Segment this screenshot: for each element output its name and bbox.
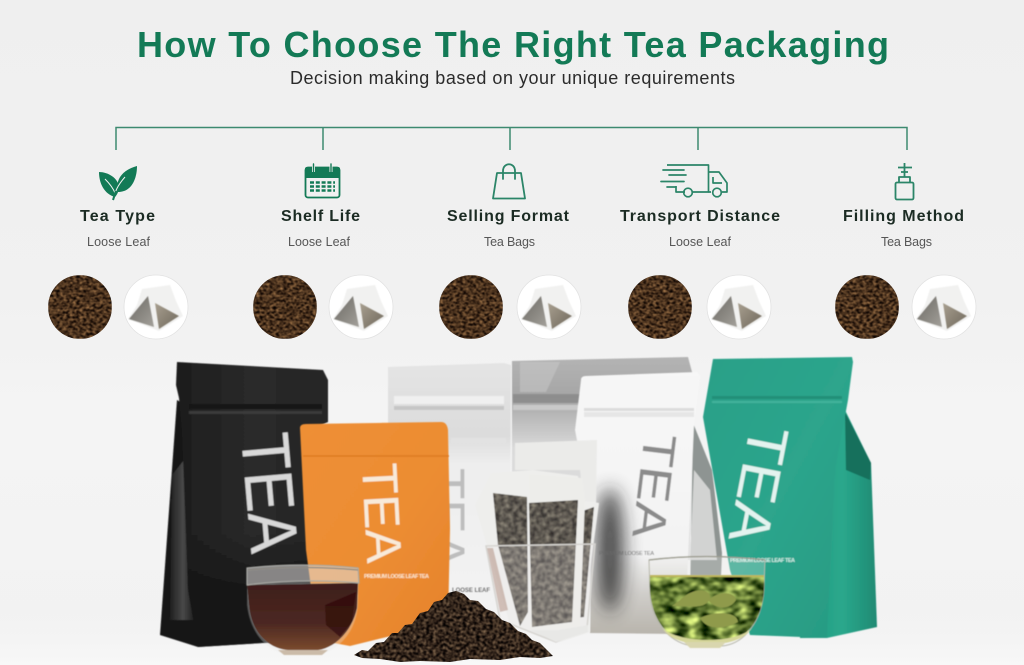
heading: transport distance: Transport Distance bbox=[620, 208, 780, 225]
black stand-up pouch bbox=[160, 362, 328, 647]
connector tree bbox=[116, 128, 907, 150]
tea bag swatch bbox=[912, 275, 976, 339]
icon: leaf bbox=[99, 166, 137, 200]
teal stand-up pouch bbox=[703, 357, 877, 638]
heading: filling method: Filling Method bbox=[843, 208, 964, 225]
tea leaf swatch bbox=[628, 275, 692, 339]
label: tea bags: Tea Bags bbox=[484, 235, 535, 249]
green tea cup bbox=[648, 556, 766, 648]
pack caption: loose leaf: LOOSE LEAF bbox=[452, 588, 490, 594]
silver pouch bbox=[575, 372, 722, 634]
heading: selling format: Selling Format bbox=[447, 208, 570, 225]
loose tea pile bbox=[354, 591, 553, 662]
product photo: tea packaging bbox=[160, 357, 877, 665]
pack lettering: tea: TEA bbox=[419, 468, 475, 569]
pack caption: premium loose leaf tea: PREMIUM LOOSE LEAF TEA bbox=[364, 574, 429, 580]
pack caption: premium loose tea: PREMIUM LOOSE TEA bbox=[599, 551, 654, 557]
icon: filling machine bbox=[896, 163, 914, 200]
icon: truck bbox=[661, 165, 727, 197]
heading: tea type: Tea Type bbox=[80, 208, 155, 225]
panel: selling format bbox=[439, 164, 581, 339]
icon: calendar bbox=[305, 164, 340, 198]
tea bag swatch bbox=[329, 275, 393, 339]
pack lettering: tea: TEA bbox=[717, 421, 801, 549]
clear tea sachets bbox=[475, 440, 599, 642]
panel: transport distance bbox=[620, 165, 780, 339]
label: loose leaf: Loose Leaf bbox=[288, 235, 351, 249]
heading: shelf life: Shelf Life bbox=[281, 208, 360, 225]
title: How To Choose The Right Tea Packaging bbox=[137, 24, 889, 65]
pack caption: premium loose leaf tea: PREMIUM LOOSE LEAF TEA bbox=[730, 558, 795, 564]
white foil pouch, back bbox=[388, 363, 511, 605]
label: tea bags: Tea Bags bbox=[881, 235, 932, 249]
subtitle: Decision making based on your unique requirements bbox=[290, 68, 735, 88]
tea leaf swatch bbox=[439, 275, 503, 339]
label: loose leaf: Loose Leaf bbox=[669, 235, 732, 249]
icon: shopping bag bbox=[493, 164, 525, 198]
panel: tea type bbox=[48, 166, 188, 339]
label: loose leaf: Loose Leaf bbox=[87, 235, 151, 249]
tea leaf swatch bbox=[253, 275, 317, 339]
orange pouch bbox=[300, 422, 450, 646]
pack lettering: tea: TEA bbox=[226, 430, 312, 556]
pack lettering: tea: TEA bbox=[351, 462, 412, 565]
tea bag swatch bbox=[517, 275, 581, 339]
amber tea cup bbox=[247, 565, 359, 655]
tea leaf swatch bbox=[48, 275, 112, 339]
tea bag swatch bbox=[124, 275, 188, 339]
panel: filling method bbox=[835, 163, 976, 339]
tea leaf swatch bbox=[835, 275, 899, 339]
glass holder bbox=[486, 544, 595, 642]
pack lettering: tea: TEA bbox=[622, 431, 687, 542]
panel: shelf life bbox=[253, 164, 393, 339]
tea bag swatch bbox=[707, 275, 771, 339]
gray foil pouch bbox=[512, 357, 692, 560]
